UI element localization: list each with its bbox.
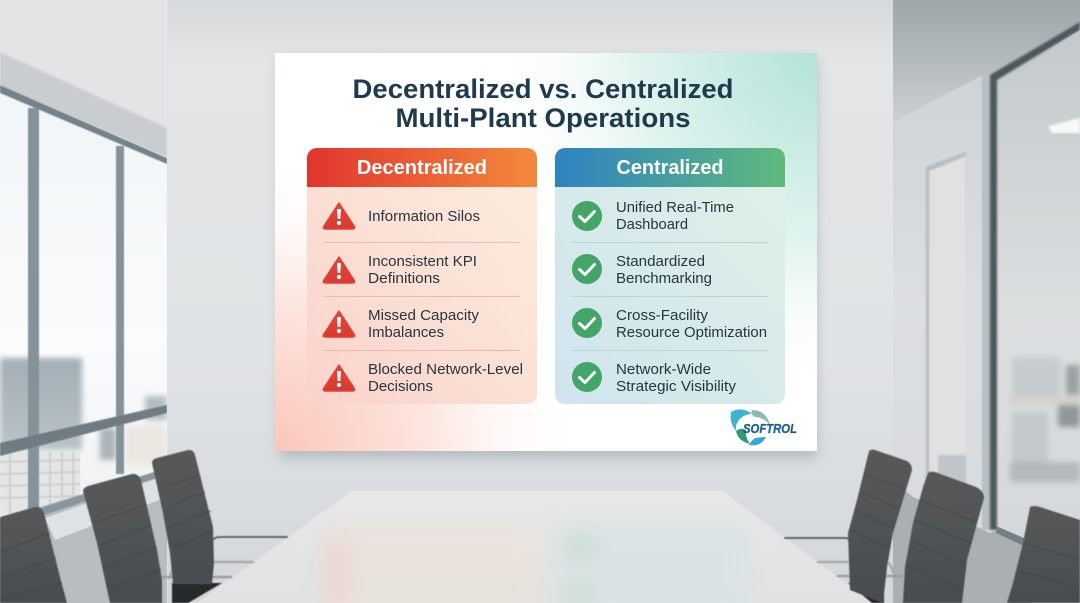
right wall, door and glass partition [893, 0, 1080, 603]
item: blocked network-level decisions [323, 362, 523, 395]
logo: softrol: SOFTROL [743, 421, 797, 436]
chair middle left [83, 474, 162, 603]
item: inconsistent KPI definitions [323, 254, 477, 287]
back wall [168, 0, 893, 603]
left window wall [0, 0, 167, 603]
conference table [197, 491, 873, 603]
panel: centralized [555, 148, 785, 404]
chair arms [160, 537, 287, 578]
item: blocked network-level decisions: Blocked Network-Level [368, 362, 523, 378]
item: network-wide strategic visibility: Strategic Visibility [616, 379, 737, 395]
panel header: centralized [555, 148, 785, 187]
item: inconsistent KPI definitions: Definitions [368, 271, 440, 287]
item: network-wide strategic visibility: Network-Wide [616, 362, 711, 378]
item: standardized benchmarking [572, 254, 712, 287]
item: inconsistent KPI definitions: Inconsistent KPI [368, 254, 477, 270]
item: blocked network-level decisions: Decisions [368, 379, 433, 395]
item: information silos [323, 203, 480, 229]
right chairs [785, 450, 1080, 603]
item: missed capacity imbalances: Imbalances [368, 325, 444, 341]
item: unified real-time dashboard [572, 200, 734, 233]
chair middle right [903, 472, 984, 603]
item: cross-facility resource optimization: Resource Optimization [616, 325, 767, 341]
chair near left [0, 507, 67, 603]
wall poster [275, 53, 817, 458]
item: standardized benchmarking: Standardized [616, 254, 705, 270]
left chairs [0, 450, 287, 603]
chair arms [785, 538, 902, 576]
chair far right [848, 450, 912, 603]
item: cross-facility resource optimization [572, 308, 767, 341]
panel header: decentralized [307, 148, 537, 187]
chair far left [152, 450, 214, 584]
panel header: centralized: Centralized [616, 157, 724, 179]
item: missed capacity imbalances [323, 308, 480, 341]
chair near right [1007, 506, 1080, 603]
item: missed capacity imbalances: Missed Capacity [368, 308, 480, 324]
window frames [0, 85, 167, 530]
logo: softrol [731, 409, 797, 445]
item: network-wide strategic visibility [572, 362, 737, 395]
item: standardized benchmarking: Benchmarking [616, 271, 712, 287]
item: unified real-time dashboard: Dashboard [616, 217, 688, 233]
city skyline [0, 358, 167, 465]
lower building grid [0, 452, 80, 514]
item: information silos: Information Silos [368, 209, 480, 225]
title: Multi-Plant Operations [396, 103, 690, 133]
panel header: decentralized: Decentralized [357, 157, 487, 179]
panel: decentralized [307, 148, 537, 404]
title [352, 74, 734, 133]
item: unified real-time dashboard: Unified Real-Time [616, 200, 734, 216]
table reflection [325, 525, 748, 603]
title: Decentralized vs. Centralized [352, 74, 734, 104]
item: cross-facility resource optimization: Cross-Facility [616, 308, 709, 324]
